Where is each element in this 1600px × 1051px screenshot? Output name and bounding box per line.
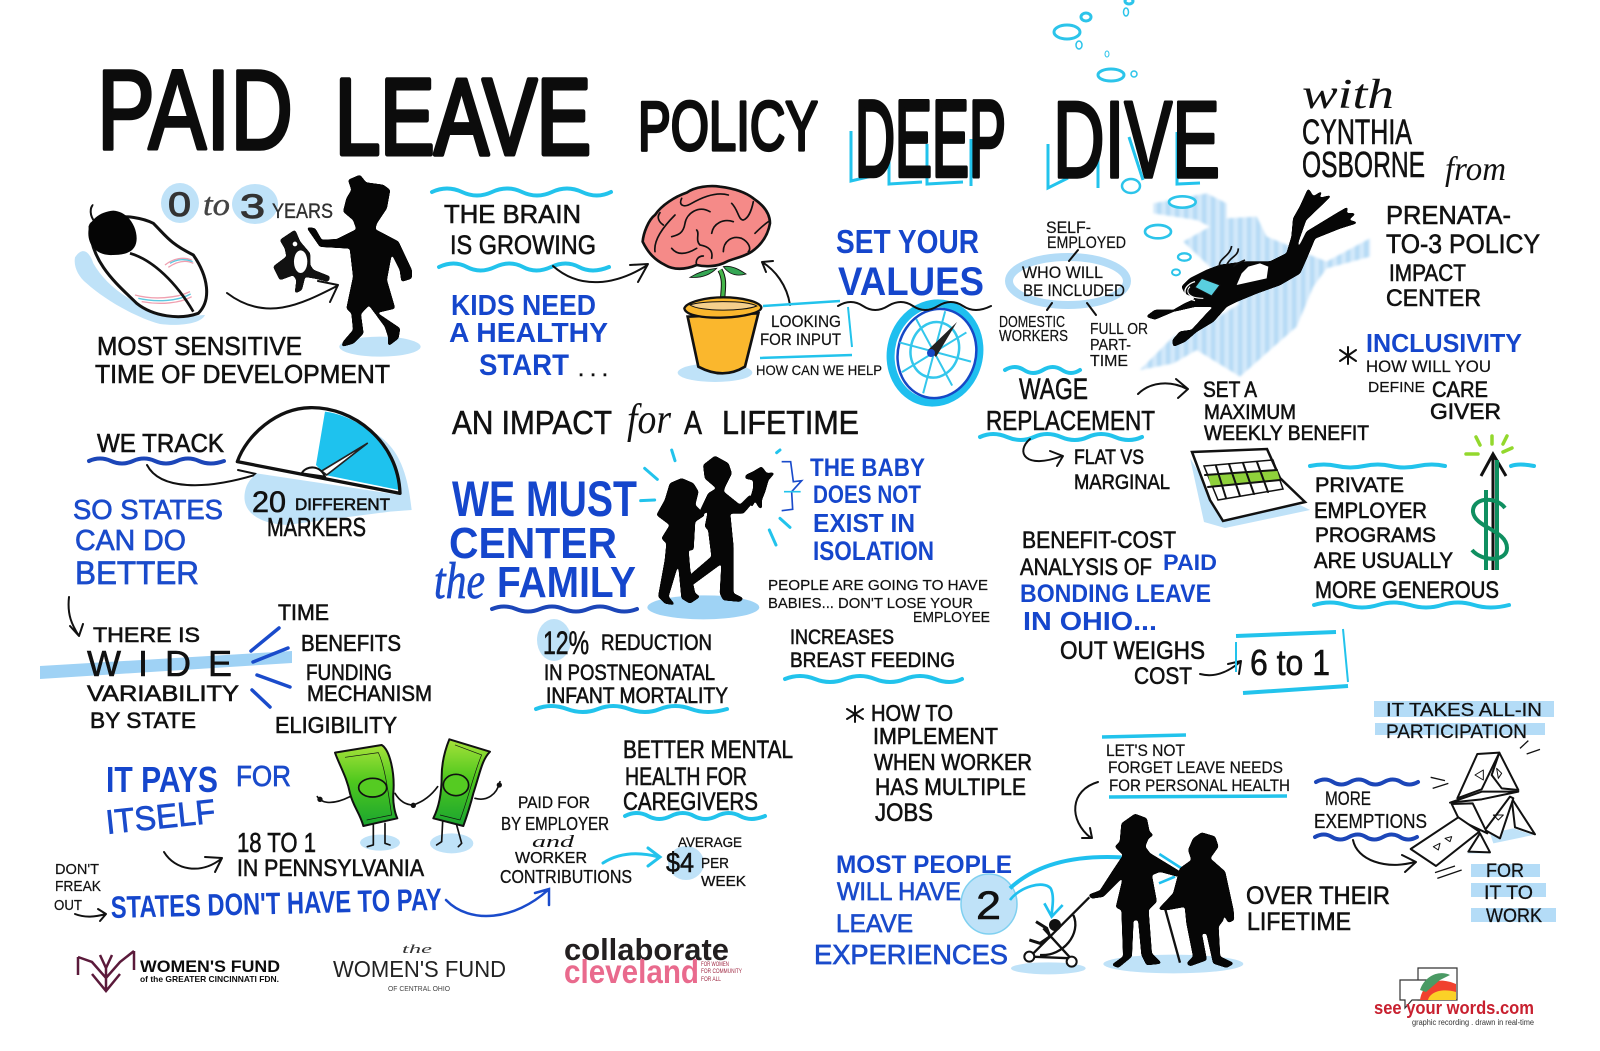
text: increases breast feeding — [785, 626, 962, 682]
panel: benefit-cost analysis — [1020, 527, 1348, 693]
stat: 12 percent reduction: 12% — [543, 625, 589, 661]
looking for input box: HOW CAN WE HELP — [756, 362, 882, 378]
panel: wide variability: BY STATE — [90, 708, 196, 733]
callout: 6 to 1 — [1236, 629, 1348, 693]
panel: paid for by employer: PAID FOR — [518, 793, 590, 812]
text: so states can do better: BETTER — [75, 555, 199, 591]
panel: all-in participation: EXEMPTIONS — [1314, 811, 1427, 833]
arrow — [446, 889, 549, 916]
panel: wage replacement: WEEKLY BENEFIT — [1204, 422, 1369, 445]
panel: who will be included: WORKERS — [999, 328, 1068, 345]
text: people are going to have babies: EMPLOYEE — [913, 609, 990, 626]
logo: collaborate cleveland: FOR COMMUNITY — [701, 968, 742, 975]
logo: collaborate cleveland: cleveland — [564, 953, 699, 990]
looking for input box: FOR INPUT — [760, 330, 841, 349]
speaker credit: IMPACT — [1389, 260, 1466, 287]
speaker credit: with — [1302, 72, 1394, 118]
caption: MOST SENSITIVE — [97, 331, 302, 361]
panel: benefit-cost analysis: PAID — [1163, 550, 1217, 575]
panel: it pays for itself: 18 TO 1 — [237, 827, 316, 858]
panel: wide variability: THERE IS — [93, 624, 200, 647]
text: how to implement: HOW TO — [871, 700, 953, 726]
panel: we must center the family: FAMILY — [497, 558, 636, 607]
callout: the baby does not exist in isolation: THE BABY — [810, 454, 925, 482]
panel: inclusivity: HOW WILL YOU — [1366, 357, 1491, 376]
label: 20 different markers: MARKERS — [267, 512, 366, 542]
heading: impact for a lifetime — [452, 397, 859, 443]
panel: paid for by employer — [500, 793, 746, 890]
text: don't freak out: DON'T — [55, 861, 99, 878]
arrow — [227, 281, 338, 309]
callout: let's not forget — [1075, 735, 1290, 838]
panel: inclusivity: DEFINE — [1368, 379, 1425, 396]
text: don't freak out — [54, 861, 106, 921]
panel: wide variability: MECHANISM — [307, 681, 432, 706]
text: over their lifetime: LIFETIME — [1247, 908, 1351, 936]
logo: women's fund central ohio: OF CENTRAL OHIO — [388, 986, 451, 993]
looking for input box: LOOKING — [771, 312, 841, 331]
panel: wage replacement: MAXIMUM — [1204, 401, 1296, 424]
stat: 12 percent reduction — [536, 619, 728, 712]
panel: early development — [75, 175, 421, 389]
age range: to — [203, 186, 230, 222]
panel: paid for by employer: BY EMPLOYER — [501, 814, 609, 834]
panel: benefit-cost analysis: OUT WEIGHS — [1060, 637, 1205, 665]
panel: who will be included: PART- — [1090, 337, 1131, 354]
panel: most people will have 2 leave experiences: EXPERIENCES — [814, 939, 1008, 970]
logo: women's fund cincinnati — [78, 951, 280, 991]
icon: house of cards — [1411, 741, 1540, 878]
text: how to implement: JOBS — [875, 799, 933, 827]
panel: who will be included: EMPLOYED — [1047, 233, 1126, 252]
text: how to implement: IMPLEMENT — [873, 723, 998, 749]
compass needle — [927, 322, 957, 357]
panel: wide variability: FUNDING — [306, 660, 392, 685]
icon: compass — [880, 293, 990, 413]
panel: all-in participation — [1314, 700, 1556, 927]
panel: private employer programs: ARE USUALLY — [1314, 548, 1453, 573]
icon: diver — [1140, 188, 1370, 377]
speaker credit: from — [1445, 151, 1506, 188]
speaker credit — [1302, 72, 1540, 312]
logo: see your words: graphic recording . drawn in real-time — [1412, 1018, 1535, 1027]
panel: we must center the family: WE MUST — [452, 471, 637, 527]
panel: all-in participation: MORE — [1325, 789, 1371, 810]
logo: collaborate cleveland: FOR WOMEN — [701, 961, 729, 968]
panel: wage replacement — [980, 367, 1369, 528]
panel: benefit-cost analysis: BONDING LEAVE — [1020, 580, 1211, 608]
text: people are going to have babies: PEOPLE ARE GOING TO HAVE — [768, 577, 988, 594]
panel: who will be included: TIME — [1090, 353, 1128, 370]
panel: wide variability: ELIGIBILITY — [275, 712, 397, 738]
text: people are going to have babies: BABIES... DON'T LOSE YOUR — [768, 595, 973, 612]
callout: the baby does not exist in isolation: ISOLATION — [813, 536, 934, 566]
panel: paid for by employer: PER — [701, 855, 729, 872]
heading: impact for a lifetime: LIFETIME — [722, 404, 859, 441]
caption — [95, 331, 390, 389]
panel: wide variability — [40, 597, 432, 738]
text: so states can do better — [73, 494, 223, 591]
panel: who will be included: SELF- — [1046, 218, 1091, 237]
panel: it pays for itself: ITSELF — [104, 793, 217, 842]
logo: women's fund central ohio: WOMEN'S FUND — [333, 956, 506, 982]
icon: child with teddy — [273, 175, 421, 357]
logo: see your words — [1374, 968, 1535, 1027]
icon: dollar arrow — [1466, 436, 1512, 570]
text: over their lifetime — [1246, 882, 1390, 936]
panel: who will be included — [999, 218, 1148, 370]
logo: women's fund central ohio: the — [402, 941, 432, 956]
panel: benefit-cost analysis: ANALYSIS OF — [1020, 554, 1152, 581]
panel: paid for by employer: $4 — [666, 847, 694, 878]
healthy start: ... — [578, 356, 608, 381]
callout: let's not forget: FOR PERSONAL HEALTH — [1109, 776, 1290, 795]
healthy start: A HEALTHY — [449, 317, 608, 348]
panel: we track gauge: WE TRACK — [97, 428, 225, 458]
callout: let's not forget: FORGET LEAVE NEEDS — [1108, 758, 1283, 777]
speaker credit: PRENATA- — [1386, 200, 1511, 230]
icon: dancing dollar bills — [317, 739, 502, 853]
age range: YEARS — [272, 200, 333, 223]
text: so states can do better: SO STATES — [73, 494, 223, 525]
panel: most people will have 2 leave experiences: 2 — [976, 884, 1001, 928]
panel: who will be included: DOMESTIC — [999, 314, 1065, 331]
panel: better mental health: BETTER MENTAL — [623, 736, 793, 764]
heading: impact for a lifetime: for — [627, 397, 672, 443]
panel: we track gauge — [73, 408, 412, 591]
healthy start — [449, 290, 608, 382]
panel: inclusivity: INCLUSIVITY — [1366, 328, 1522, 358]
text: people are going to have babies — [768, 577, 990, 626]
panel: paid for by employer: and — [532, 832, 575, 851]
panel: inclusivity: CARE — [1432, 377, 1488, 402]
speaker credit: OSBORNE — [1302, 144, 1425, 185]
title: POLICY — [638, 87, 818, 165]
panel: set your values: VALUES — [838, 260, 984, 304]
icon: family silhouette — [641, 450, 802, 619]
title: DIVE — [1053, 79, 1220, 201]
panel: we must center the family: CENTER — [449, 519, 617, 568]
panel: all-in participation: IT TO — [1484, 883, 1533, 904]
icon: swaddled baby — [75, 205, 207, 325]
panel: wage replacement: MARGINAL — [1074, 471, 1170, 494]
panel: brain is growing — [432, 186, 882, 382]
panel: it pays for itself: IN PENNSYLVANIA — [237, 855, 424, 882]
panel: set your values — [836, 223, 991, 413]
title: PAID — [97, 47, 293, 173]
panel: all-in participation: PARTICIPATION — [1386, 722, 1527, 743]
heading: impact for a lifetime: A — [684, 404, 702, 441]
panel: most people will have 2 leave experiences: WILL HAVE — [837, 878, 961, 906]
text: don't freak out: FREAK — [55, 878, 101, 895]
panel: all-in participation: WORK — [1486, 906, 1542, 927]
panel: wage replacement: FLAT VS — [1074, 446, 1144, 469]
panel: better mental health: CAREGIVERS — [623, 788, 758, 816]
text: how to implement: WHEN WORKER — [874, 749, 1032, 775]
panel: wage replacement: REPLACEMENT — [986, 405, 1155, 436]
text: how to implement: HAS MULTIPLE — [875, 774, 1026, 801]
label: 20 different markers: 20 — [252, 486, 286, 519]
panel: benefit-cost analysis: COST — [1134, 663, 1192, 690]
panel: most people will have 2 leave experiences — [814, 814, 1390, 974]
looking for input box — [756, 261, 882, 378]
text: so states can do better: CAN DO — [75, 525, 186, 557]
speaker credit: CENTER — [1386, 285, 1481, 312]
heading: impact for a lifetime: AN IMPACT — [452, 404, 612, 441]
healthy start: START — [479, 349, 569, 382]
callout: 6 to 1: 6 to 1 — [1250, 642, 1330, 683]
panel: wage replacement: SET A — [1203, 377, 1257, 402]
stat: 12 percent reduction: IN POSTNEONATAL — [544, 660, 715, 685]
panel: inclusivity — [1340, 328, 1522, 424]
panel: wide variability: TIME — [278, 600, 329, 625]
panel: we must center the family — [434, 450, 802, 619]
panel: most people will have 2 leave experiences: MOST PEOPLE — [836, 851, 1012, 879]
title: LEAVE — [335, 56, 591, 177]
logo: collaborate cleveland: FOR ALL — [701, 976, 721, 983]
speaker credit: TO-3 POLICY — [1386, 229, 1540, 259]
panel: it pays for itself — [54, 739, 549, 925]
icon: caregiver with elder and stroller — [1010, 814, 1243, 974]
panel: wide variability: VARIABILITY — [87, 681, 239, 706]
panel: private employer programs: MORE GENEROUS — [1315, 577, 1499, 604]
panel: it pays for itself: IT PAYS — [106, 759, 218, 800]
label: 20 different markers: DIFFERENT — [295, 495, 390, 514]
chart: gauge — [237, 408, 412, 525]
logo: women's fund cincinnati: of the GREATER CINCINNATI FDN. — [140, 974, 279, 984]
healthy start: KIDS NEED — [451, 290, 596, 322]
panel: brain is growing: THE BRAIN — [444, 199, 581, 229]
text: increases breast feeding: BREAST FEEDING — [790, 649, 955, 672]
stat: 12 percent reduction: INFANT MORTALITY — [546, 683, 728, 708]
panel: wage replacement: WAGE — [1019, 373, 1088, 406]
icon: brain in pot — [643, 186, 770, 382]
panel: private employer programs: PROGRAMS — [1315, 524, 1436, 547]
title — [97, 47, 1220, 201]
logo: collaborate cleveland: collaborate — [564, 932, 729, 967]
panel: paid for by employer: CONTRIBUTIONS — [500, 867, 632, 887]
panel: all-in participation: FOR — [1486, 861, 1524, 882]
logo: collaborate cleveland — [564, 932, 742, 990]
age range: 0 — [168, 186, 191, 224]
panel: most people will have 2 leave experiences: LEAVE — [836, 910, 913, 938]
callout: the baby does not exist in isolation — [810, 454, 934, 566]
panel: set your values: SET YOUR — [836, 223, 979, 260]
panel: it pays for itself: FOR — [236, 761, 291, 793]
panel: benefit-cost analysis: IN OHIO... — [1023, 606, 1157, 636]
logo: women's fund cincinnati: WOMEN'S FUND — [140, 957, 280, 976]
panel: private employer programs: PRIVATE — [1315, 474, 1404, 497]
panel: private employer programs — [1310, 436, 1534, 608]
panel: who will be included: WHO WILL — [1022, 263, 1103, 282]
arrow to brain — [553, 264, 648, 282]
panel: paid for by employer: AVERAGE — [678, 834, 742, 850]
logo: women's fund central ohio — [333, 941, 506, 993]
panel: brain is growing: IS GROWING — [450, 230, 596, 260]
speaker credit: CYNTHIA — [1302, 113, 1412, 152]
panel: we must center the family: the — [434, 553, 485, 610]
title: DEEP — [855, 78, 1006, 200]
panel: wide variability: BENEFITS — [301, 630, 401, 656]
text: states don't have to pay: STATES DON'T HAVE TO PAY — [110, 882, 442, 925]
age range: 3 — [240, 188, 265, 226]
bubbles — [1054, 0, 1140, 193]
panel: who will be included: BE INCLUDED — [1023, 281, 1125, 300]
caption: TIME OF DEVELOPMENT — [95, 359, 390, 389]
icon: calendar — [1190, 449, 1310, 528]
text: increases breast feeding: INCREASES — [790, 626, 894, 649]
logo: see your words: see your words.com — [1374, 998, 1534, 1018]
callout: let's not forget: LET'S NOT — [1106, 741, 1185, 760]
panel: benefit-cost analysis: BENEFIT-COST — [1022, 527, 1176, 554]
panel: better mental health — [623, 736, 793, 819]
panel: private employer programs: EMPLOYER — [1314, 498, 1427, 523]
panel: inclusivity: GIVER — [1430, 399, 1501, 424]
panel: paid for by employer: WEEK — [701, 873, 746, 890]
age range — [161, 183, 333, 226]
panel: wide variability: WIDE — [87, 643, 232, 684]
text: over their lifetime: OVER THEIR — [1246, 882, 1390, 910]
panel: all-in participation: IT TAKES ALL-IN — [1386, 700, 1542, 720]
panel: paid for by employer: WORKER — [515, 850, 587, 867]
panel: better mental health: HEALTH FOR — [625, 763, 747, 791]
text: how to implement — [847, 700, 1032, 827]
text: don't freak out: OUT — [54, 897, 82, 914]
callout: the baby does not exist in isolation: DOES NOT — [813, 481, 921, 509]
label: 20 different markers — [252, 486, 390, 542]
stat: 12 percent reduction: REDUCTION — [601, 630, 712, 655]
panel: who will be included: FULL OR — [1090, 321, 1148, 338]
callout: the baby does not exist in isolation: EXIST IN — [813, 508, 915, 538]
